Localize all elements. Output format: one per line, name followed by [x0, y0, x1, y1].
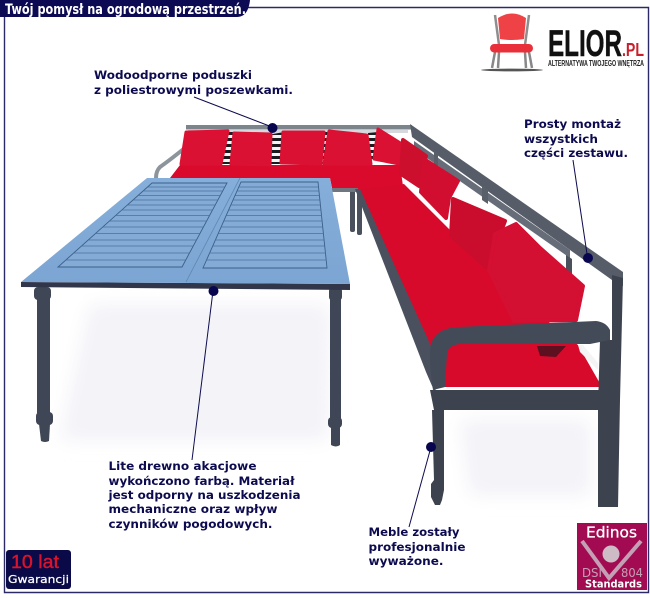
sofa	[156, 124, 623, 507]
callout: acacia wood: mechaniczne oraz wpływ	[108, 502, 278, 516]
callout: acacia wood: wykończono farbą. Materiał	[108, 474, 295, 488]
badge: Edinos standards	[577, 523, 647, 590]
badge: Edinos standards: Edinos	[586, 524, 637, 542]
logo: Elior: .PL	[622, 40, 644, 60]
table centre seam	[186, 178, 240, 282]
table legs	[34, 287, 342, 446]
callout: acacia wood: Lite drewno akacjowe	[108, 459, 257, 473]
striped cushions	[220, 132, 378, 164]
badge: Edinos standards: DSI	[582, 566, 602, 580]
callout: cushions	[94, 68, 293, 133]
floor shadows	[60, 305, 590, 495]
callout: cushions: Wodoodporne poduszki	[94, 68, 252, 82]
back pillows	[181, 129, 402, 165]
callout: balance	[368, 442, 466, 568]
table slats	[58, 182, 327, 268]
badge: 10 years warranty: Gwarancji	[8, 573, 69, 586]
badge: Edinos standards: 804	[621, 566, 643, 580]
badge: 10 years warranty: 10 lat	[11, 552, 59, 572]
sofa left frame	[355, 189, 436, 395]
sofa back rails	[156, 124, 623, 286]
logo: Elior	[481, 14, 644, 71]
badge: 10 years warranty	[6, 550, 71, 589]
back legs	[330, 188, 362, 235]
callout: cushions: z poliestrowymi poszewkami.	[94, 83, 293, 97]
cushion tie shadow	[537, 346, 566, 357]
back seat cushion	[170, 165, 403, 190]
callout: acacia wood	[107, 286, 300, 531]
callout: acacia wood: jest odporny na uszkodzenia	[107, 488, 300, 502]
side pillows	[401, 140, 583, 321]
callout: assembly: części zestawu.	[524, 146, 628, 160]
callout: acacia wood: czynników pogodowych.	[108, 517, 272, 531]
callout: assembly: wszystkich	[524, 132, 598, 146]
long seat cushion	[359, 184, 602, 387]
armrest	[430, 321, 610, 390]
callout: balance: wyważone.	[368, 554, 444, 568]
badge: Edinos standards: Standards	[585, 578, 642, 590]
table	[21, 178, 350, 446]
callout: assembly: Prosty montaż	[524, 117, 621, 131]
rear post and front frame	[430, 275, 623, 507]
table edge	[21, 282, 350, 290]
callout: assembly	[524, 117, 628, 263]
callout: balance: profesjonalnie	[368, 540, 466, 554]
callout: balance: Meble zostały	[368, 525, 460, 539]
table top	[21, 178, 350, 284]
icon: red chair	[481, 14, 543, 71]
title banner: Twój pomysł na ogrodową przestrzeń.	[5, 2, 246, 18]
